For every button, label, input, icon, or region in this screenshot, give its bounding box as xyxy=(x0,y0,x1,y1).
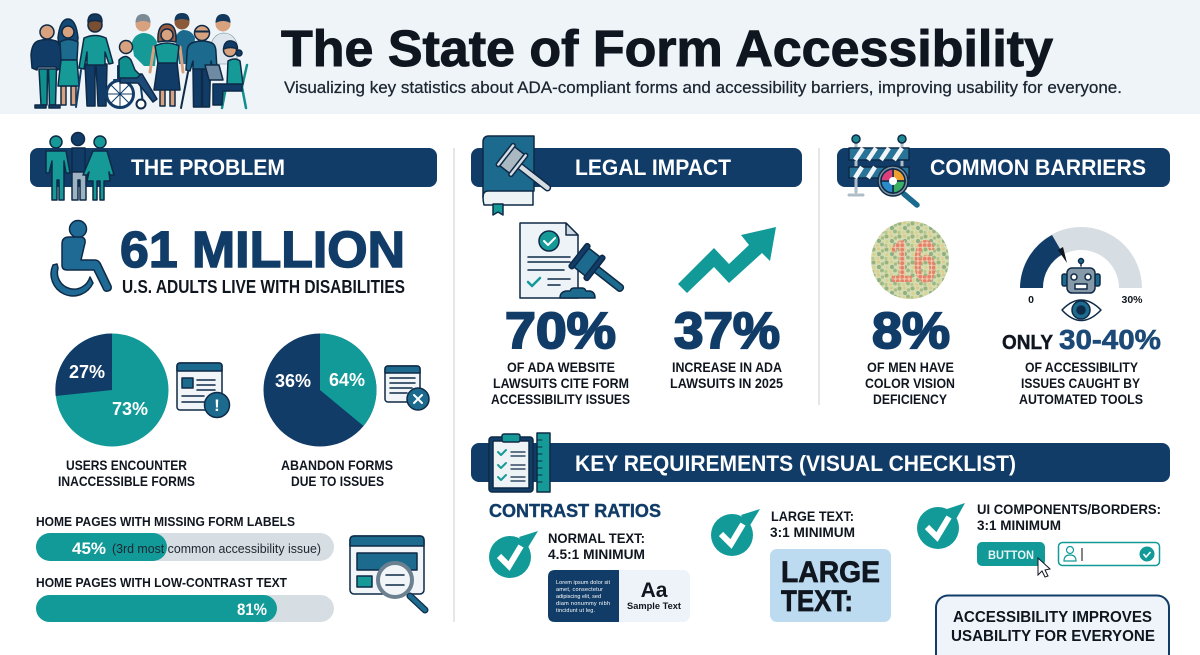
caption: 8%: DEFICIENCY xyxy=(873,391,948,407)
sample button with cursor: BUTTON xyxy=(988,550,1034,562)
check: normal text xyxy=(489,531,538,578)
large text requirement: 3:1 MINIMUM xyxy=(770,525,855,540)
person in wheelchair xyxy=(106,40,157,108)
pie chart: 27 / 73: 27% xyxy=(69,362,105,382)
heading bar: legal impact: LEGAL IMPACT xyxy=(575,155,731,180)
pie caption: abandon forms: ABANDON FORMS xyxy=(281,457,393,473)
caption: 8%: OF MEN HAVE xyxy=(867,359,954,375)
icon: wheelchair xyxy=(51,220,111,296)
caption: 70%: OF ADA WEBSITE xyxy=(507,359,615,375)
large text requirement: LARGE TEXT: xyxy=(771,509,854,524)
sample input field xyxy=(1058,542,1160,566)
stat: only 30-40%: ONLY xyxy=(1002,332,1054,354)
woman with long hair xyxy=(58,19,79,105)
icon: form with alert xyxy=(177,363,230,418)
title: The State of Form Accessibility xyxy=(281,20,1054,77)
icon: magnifier over web page xyxy=(350,536,425,610)
ui components requirement: 3:1 MINIMUM xyxy=(977,518,1061,533)
icon: three people xyxy=(46,132,114,200)
sample contrast card: Sample Text xyxy=(627,601,682,612)
large text sample card xyxy=(770,549,891,622)
panel: key requirements xyxy=(471,433,1170,655)
caption: 8%: COLOR VISION xyxy=(865,375,955,391)
caption: automated tools: AUTOMATED TOOLS xyxy=(1019,391,1143,407)
older man with glasses and cane xyxy=(181,26,217,108)
caption: 37%: LAWSUITS IN 2025 xyxy=(670,375,783,391)
normal text requirement: 4.5:1 MINIMUM xyxy=(548,547,645,562)
bar: low-contrast text: HOME PAGES WITH LOW-CONTRAST TEXT xyxy=(36,575,287,590)
bar: low-contrast text xyxy=(36,575,334,622)
header band xyxy=(0,0,1200,114)
back man in teal shirt xyxy=(132,14,157,66)
chart: ishihara colour plate showing 16 xyxy=(871,221,949,299)
stat: 37%: 37% xyxy=(674,302,780,359)
stat: only 30-40%: 30-40% xyxy=(1059,324,1161,355)
bar: missing form labels: 45% xyxy=(72,539,106,558)
icon: document with gavel xyxy=(520,223,632,302)
sample contrast card: Aa xyxy=(641,579,668,602)
column dividers xyxy=(454,148,819,622)
icon: form with alert: ! xyxy=(214,396,220,415)
sample contrast card: diam nonummy nibh xyxy=(556,601,610,607)
chart: gauge: 0 xyxy=(1028,294,1034,306)
pie chart: 36 / 64: 64% xyxy=(329,370,365,390)
pie caption: users encounter: USERS ENCOUNTER xyxy=(66,457,187,473)
woman in teal shirt and navy skirt xyxy=(150,24,183,106)
callout: accessibility improves usability: USABILITY FOR EVERYONE xyxy=(951,628,1155,645)
stat: 70%: 70% xyxy=(505,302,616,359)
caption: 70%: LAWSUITS CITE FORM xyxy=(493,375,629,391)
icon: barricade with colour magnifier xyxy=(849,135,917,205)
bar: missing form labels: HOME PAGES WITH MISSING FORM LABELS xyxy=(36,514,295,529)
chart: ishihara colour plate showing 16: 16 xyxy=(889,228,937,295)
heading bar: key requirements: KEY REQUIREMENTS (VISUAL CHECKLIST) xyxy=(575,451,1016,476)
heading bar: key requirements xyxy=(471,443,1170,482)
icon: form with x xyxy=(385,366,429,410)
caption: automated tools: ISSUES CAUGHT BY xyxy=(1021,375,1141,391)
callout: accessibility improves usability xyxy=(936,596,1169,655)
heading bar: the problem: THE PROBLEM xyxy=(131,155,285,180)
sample contrast card: adipiscing elit, sed xyxy=(556,594,601,600)
back man in light shirt xyxy=(211,14,237,64)
pie chart: 36 / 64: 36% xyxy=(275,371,311,391)
sample contrast card: amet, consectetur xyxy=(556,587,603,593)
normal text requirement: NORMAL TEXT: xyxy=(548,531,645,546)
caption: automated tools: OF ACCESSIBILITY xyxy=(1025,359,1139,375)
illustration: diverse group of people xyxy=(31,13,247,108)
bar: missing form labels xyxy=(36,514,334,561)
stat caption: U.S. ADULTS LIVE WITH DISABILITIES xyxy=(122,276,405,297)
stat: 61 million: 61 MILLION xyxy=(120,221,405,278)
subheading: contrast ratios: CONTRAST RATIOS xyxy=(489,500,661,521)
heading bar: the problem xyxy=(30,148,437,187)
icon: eye xyxy=(1062,300,1101,320)
sample contrast card: Lorem ipsum dolor sit xyxy=(556,580,610,586)
pie caption: abandon forms: DUE TO ISSUES xyxy=(291,473,384,489)
sample contrast card: tincidunt ut leg. xyxy=(556,608,595,614)
back man in blue shirt xyxy=(174,13,195,64)
ui components requirement: UI COMPONENTS/BORDERS: xyxy=(977,502,1161,517)
panel: legal impact xyxy=(471,134,802,407)
icon: clipboard and ruler xyxy=(489,433,550,492)
chart: gauge: 30% xyxy=(1121,294,1143,306)
subtitle: Visualizing key statistics about ADA-compliant forms and accessibility barriers, improving usability for everyone. xyxy=(284,78,1122,97)
pie chart: 27 / 73: 73% xyxy=(112,399,148,419)
heading bar: common barriers: COMMON BARRIERS xyxy=(930,155,1146,180)
heading bar: legal impact xyxy=(471,148,802,187)
sample contrast card xyxy=(548,570,690,622)
bar: low-contrast text: 81% xyxy=(237,600,267,619)
panel: common barriers xyxy=(837,135,1170,407)
caption: 70%: ACCESSIBILITY ISSUES xyxy=(491,391,630,407)
chart: gauge xyxy=(1020,227,1143,306)
icon: law book and gavel xyxy=(483,134,558,215)
caption: 37%: INCREASE IN ADA xyxy=(672,359,782,375)
stat: 8%: 8% xyxy=(872,302,950,359)
check: ui components xyxy=(917,503,965,549)
pie chart: 27 / 73 xyxy=(55,333,169,446)
callout: accessibility improves usability: ACCESSIBILITY IMPROVES xyxy=(953,609,1152,626)
man in navy sweater xyxy=(31,25,63,108)
icon: robot xyxy=(1062,258,1100,293)
pie chart: 36 / 64 xyxy=(264,334,376,446)
stat: only 30-40% xyxy=(1002,324,1161,355)
heading bar: common barriers xyxy=(837,148,1170,187)
bar: missing form labels: (3rd most common accessibility issue) xyxy=(112,541,321,556)
sample button with cursor xyxy=(977,542,1050,577)
man with cane xyxy=(76,14,113,107)
check: large text xyxy=(711,509,760,556)
icon: rising arrow xyxy=(678,227,776,293)
seated woman with laptop xyxy=(205,41,247,108)
large text sample card: LARGE xyxy=(781,556,880,589)
pie caption: users encounter: INACCESSIBLE FORMS xyxy=(58,473,195,489)
panel: the problem xyxy=(30,132,437,622)
large text sample card: TEXT: xyxy=(781,585,853,618)
